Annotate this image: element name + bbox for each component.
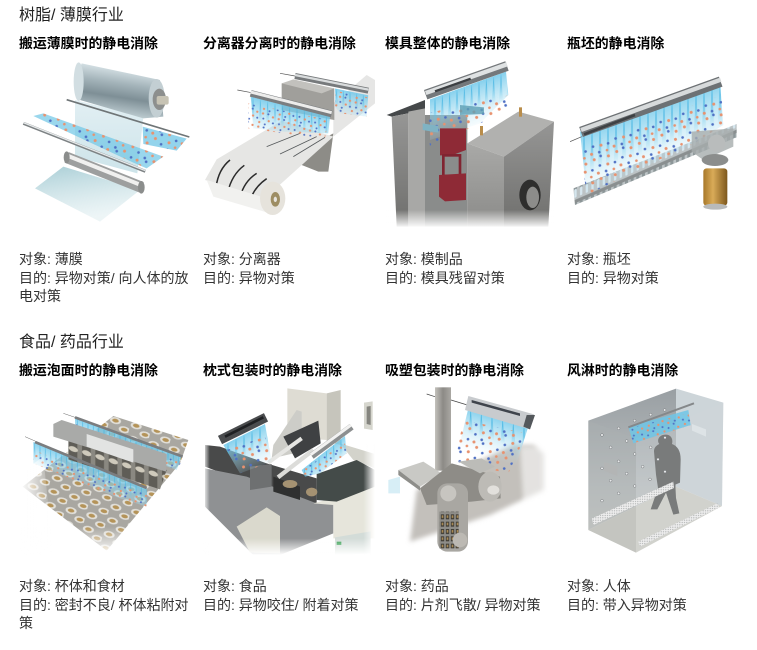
description: 对象: 瓶坯 — [567, 251, 631, 267]
panel: air shower — [567, 362, 724, 612]
heading: resin / film industry: 树脂/ 薄膜行业 — [19, 7, 124, 24]
description: 目的: 密封不良/ 杯体粘附对 — [19, 596, 189, 612]
illustration: blister packaging — [388, 387, 546, 552]
description: 对象: 杯体和食材 — [19, 578, 125, 594]
description: 目的: 带入异物对策 — [567, 596, 687, 612]
title: blister packaging: 吸塑包装时的静电消除 — [385, 362, 524, 378]
panel: cup noodles — [19, 362, 189, 631]
illustration: pillow packaging machine — [205, 388, 374, 554]
title: mold: 模具整体的静电消除 — [385, 35, 510, 51]
description: 对象: 模制品 — [385, 251, 463, 267]
title: pillow packaging: 枕式包装时的静电消除 — [203, 362, 342, 378]
title: film conveying: 搬运薄膜时的静电消除 — [19, 35, 158, 51]
title: air shower: 风淋时的静电消除 — [567, 362, 678, 378]
description — [19, 578, 189, 631]
title: separator: 分离器分离时的静电消除 — [203, 35, 356, 51]
illustration: air shower room with person — [588, 388, 724, 552]
illustration: mold with ionizer — [386, 61, 554, 226]
description: 目的: 异物对策 — [203, 270, 295, 286]
illustration: separator slitting — [205, 73, 375, 215]
description — [385, 251, 505, 286]
description: 目的: 异物咬住/ 附着对策 — [203, 596, 359, 612]
description: 目的: 异物对策/ 向人体的放 — [19, 270, 189, 286]
description: 对象: 药品 — [385, 578, 449, 594]
illustration: cup tray with ionizers — [23, 413, 188, 550]
description — [203, 251, 295, 286]
description: 对象: 薄膜 — [19, 251, 83, 267]
title: cup noodles: 搬运泡面时的静电消除 — [19, 362, 158, 378]
description: 目的: 模具残留对策 — [385, 270, 505, 286]
description: 目的: 片剂飞散/ 异物对策 — [385, 596, 541, 612]
description — [567, 578, 687, 612]
illustration: preform conveyor — [570, 76, 737, 210]
description: 策 — [19, 615, 33, 631]
panel: mold — [385, 35, 554, 286]
description: 对象: 人体 — [567, 578, 631, 594]
description — [203, 578, 359, 612]
heading: food / pharma industry: 食品/ 药品行业 — [19, 334, 124, 351]
description — [385, 578, 541, 612]
panel: pillow packaging — [203, 362, 374, 612]
description — [567, 251, 659, 286]
description: 目的: 异物对策 — [567, 270, 659, 286]
description: 电对策 — [19, 288, 61, 304]
description: 对象: 分离器 — [203, 251, 281, 267]
title: preform: 瓶坯的静电消除 — [567, 35, 664, 51]
description: 对象: 食品 — [203, 578, 267, 594]
description — [19, 251, 189, 304]
illustration: film rollers with ionizer bars — [22, 62, 190, 222]
panel: blister packaging — [385, 362, 546, 612]
panel: film conveying — [19, 35, 190, 304]
panel: preform — [567, 35, 737, 286]
panel: separator — [203, 35, 375, 286]
